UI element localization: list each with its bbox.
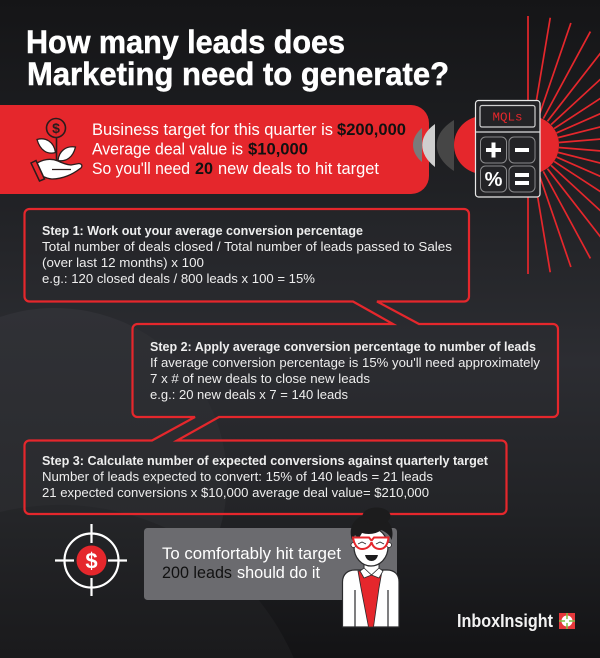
text: step 2: Step 2: Apply average conversion percentage to number of leads xyxy=(150,340,536,354)
text: step 3: Number of leads expected to convert: 15% of 140 leads = 21 leads xyxy=(42,470,433,484)
icon: logo mark xyxy=(559,613,575,629)
text: step 1: e.g.: 120 closed deals / 800 leads x 100 = 15% xyxy=(42,272,315,286)
banner text: So you'll need xyxy=(92,160,190,178)
text: step 1: Step 1: Work out your average conversion percentage xyxy=(42,224,363,238)
person smile xyxy=(365,555,378,561)
logo: InboxInsight: InboxInsight xyxy=(457,611,553,631)
text: step 3: 21 expected conversions x $10,000 average deal value= $210,000 xyxy=(42,486,429,500)
graphic: sunburst rays xyxy=(528,16,600,274)
icon: hand holding plant with coin xyxy=(31,118,82,181)
icon: hand holding plant with coin: $ xyxy=(52,120,60,136)
text: step 3: Step 3: Calculate number of expected conversions against quarterly target xyxy=(42,454,489,468)
text: step 2: e.g.: 20 new deals x 7 = 140 leads xyxy=(150,388,348,402)
banner text: $10,000 xyxy=(248,140,308,158)
person head xyxy=(354,528,388,566)
banner text: new deals to hit target xyxy=(218,160,379,178)
text: step 2: If average conversion percentage is 15% you'll need approximately xyxy=(150,356,541,370)
banner text: $200,000 xyxy=(337,121,406,139)
text: step 1: Total number of deals closed / Total number of leads passed to Sales xyxy=(42,240,452,254)
callout: conclusion xyxy=(144,528,397,600)
icon: target with dollar xyxy=(55,524,127,596)
title: How many leads does xyxy=(26,24,345,60)
icon: target with dollar: $ xyxy=(85,548,98,574)
title: Marketing need to generate? xyxy=(27,56,449,92)
icon: calculator xyxy=(476,100,540,197)
text: step 2: 7 x # of new deals to close new leads xyxy=(150,372,370,386)
calculator display: MQLs xyxy=(492,112,522,124)
callout: conclusion: To comfortably hit target xyxy=(162,544,341,563)
banner text xyxy=(92,121,406,178)
person glasses xyxy=(353,538,388,549)
panel: connected step speech boxes xyxy=(24,209,558,514)
callout: conclusion: 200 leads xyxy=(162,563,232,582)
title xyxy=(26,24,449,92)
person body xyxy=(342,570,399,627)
banner text: Average deal value is xyxy=(92,140,243,158)
text: step 2 xyxy=(150,340,541,402)
icon: person with red glasses xyxy=(342,508,399,627)
text: step 1: (over last 12 months) x 100 xyxy=(42,256,204,270)
text: step 1 xyxy=(42,224,452,286)
graphic: fading semicircles xyxy=(413,116,559,174)
callout: conclusion: should do it xyxy=(237,563,320,582)
banner text: Business target for this quarter is xyxy=(92,121,333,139)
text: step 3 xyxy=(42,454,489,500)
banner: business target xyxy=(0,105,429,194)
icon: calculator: % xyxy=(485,169,503,191)
person hair xyxy=(351,514,393,540)
banner text: 20 xyxy=(195,160,213,178)
calculator buttons xyxy=(480,137,535,192)
